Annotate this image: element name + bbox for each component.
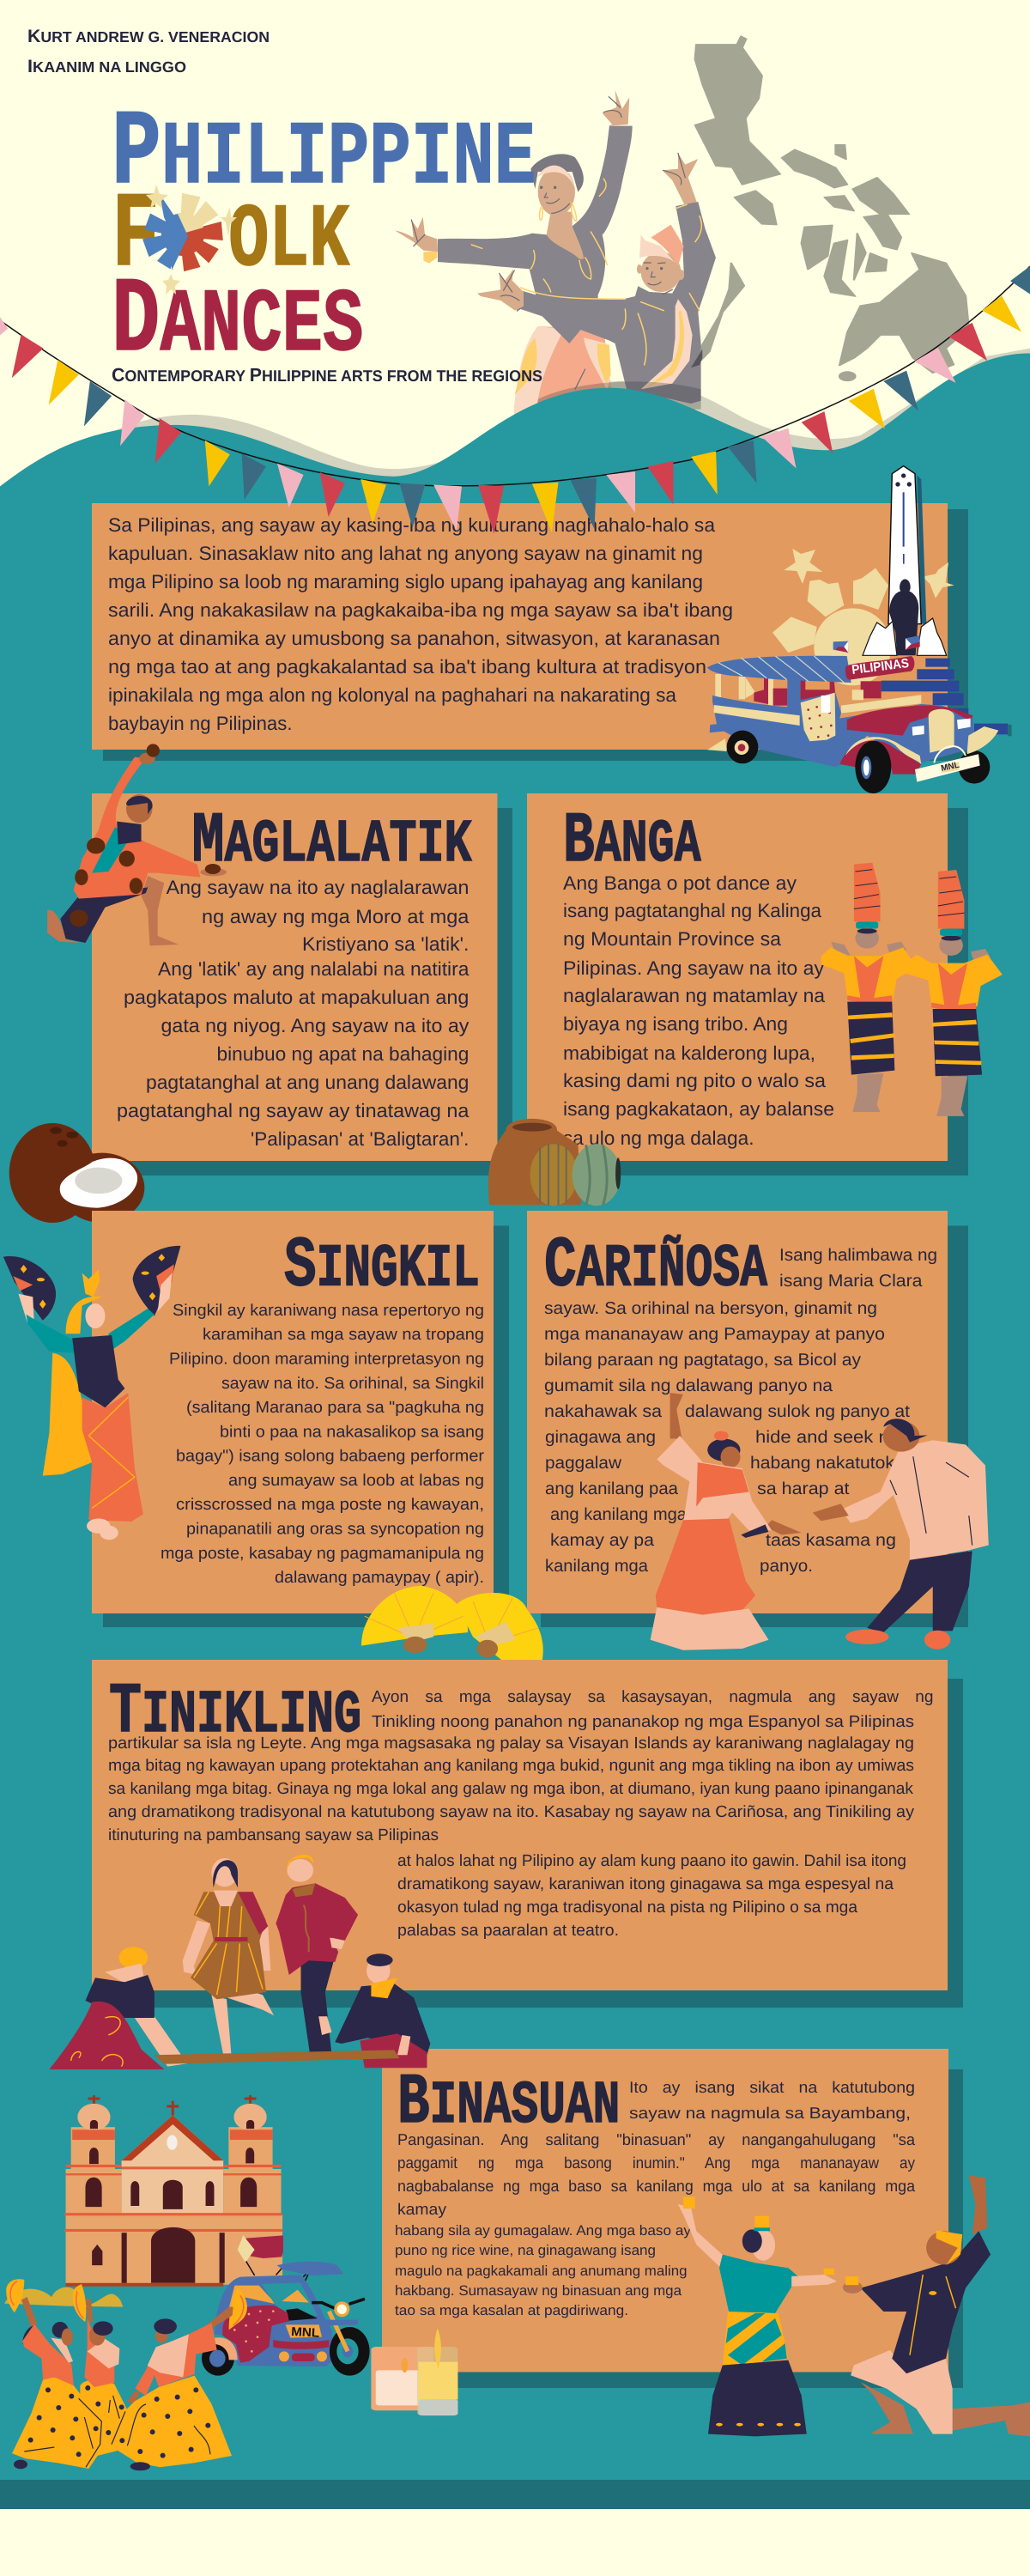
- text: maglalatik: pagtatanghal at ang unang dalawang: [146, 1072, 469, 1093]
- text: banga: biyaya ng isang tribo. Ang: [563, 1013, 788, 1035]
- text: cariñosa: dalawang sulok ng panyo at: [685, 1402, 910, 1421]
- text: banga: Ang Banga o pot dance ay: [563, 872, 797, 894]
- wave: pale back layer: [66, 349, 1030, 515]
- tricycle plate text: MNL: [291, 2325, 320, 2341]
- text: cariñosa: sa harap at: [757, 1479, 850, 1498]
- text: singkil: Pilipino. doon maraming interpretasyon ng: [169, 1350, 484, 1369]
- panel: introduction: [92, 503, 968, 761]
- text: tinikling: Tinikling noong panahon ng pananakop ng mga Espanyol sa Pilipinas: [372, 1713, 914, 1731]
- illustration: coconuts: [9, 1123, 144, 1223]
- text: cariñosa: mga mananayaw ang Pamaypay at panyo: [544, 1325, 885, 1344]
- text: banga: [563, 872, 834, 1149]
- text: maglalatik: Ang 'latik' ay ang nalalabi na natitira: [158, 958, 470, 980]
- text: introduction: sarili. Ang nakakasilaw na pagkakaiba-iba ng mga sayaw sa iba't ibang: [108, 599, 733, 621]
- text: cariñosa: Isang halimbawa ng: [779, 1246, 937, 1265]
- text: cariñosa: kanilang mga: [545, 1557, 649, 1576]
- illustration: binasuan man: [843, 2176, 1030, 2436]
- text: singkil: [161, 1302, 485, 1587]
- text: singkil: sayaw na ito. Sa orihinal, sa Singkil: [221, 1375, 484, 1393]
- text: singkil: pinapanatili ang oras sa syncopation ng: [186, 1520, 484, 1539]
- text: tinikling: itinuturing na pambansang sayaw sa Pilipinas: [108, 1826, 439, 1844]
- text: banga: Pilipinas. Ang sayaw na ito ay: [563, 957, 825, 979]
- text: tinikling: okasyon tulad ng mga tradisyonal na pista ng Pilipino o sa mga: [397, 1899, 857, 1917]
- text: cariñosa: nakahawak sa: [544, 1402, 663, 1421]
- heading: binasuan: BINASUAN: [397, 2063, 620, 2143]
- text: introduction: [108, 514, 733, 734]
- text: binasuan: nagbabalanse ng mga baso sa kanilang mga ulo at sa kanilang mga: [397, 2177, 916, 2195]
- illustration: clay pots: [488, 1119, 621, 1206]
- byline: KURT ANDREW G. VENERACION: [27, 27, 270, 46]
- text: maglalatik: pagtatanghal ng sayaw ay tinatawag na: [117, 1100, 470, 1121]
- title: OLK: [228, 191, 350, 292]
- text: singkil: dalawang pamaypay ( apir).: [275, 1569, 484, 1587]
- illustration: tinikling dancers: [49, 1855, 430, 2069]
- text: introduction: ipinakilala ng mga alon ng kolonyal na paghahari na nakarating sa: [108, 684, 676, 706]
- text: singkil: Singkil ay karaniwang nasa repertoryo ng: [173, 1302, 484, 1320]
- panel: cariñosa: [527, 1211, 968, 1627]
- text: binasuan lower block: hakbang. Sumasayaw ng binasuan ang mga: [395, 2283, 682, 2299]
- text: singkil: mga poste, kasabay ng pagmamanipula ng: [161, 1545, 484, 1563]
- text: binasuan: Ito ay isang sikat na katutubong: [629, 2078, 915, 2096]
- text: cariñosa: paggalaw: [545, 1454, 622, 1473]
- text: tinikling: partikular sa isla ng Leyte. Ang mga magsasaka ng palay sa Visayan Islands ay karaniwang naglalagay ng: [108, 1735, 914, 1753]
- text: introduction: baybayin ng Pilipinas.: [108, 713, 292, 734]
- illustration: two hero dancers: [395, 90, 716, 429]
- text: maglalatik: ng away ng mga Moro at mga: [202, 906, 470, 927]
- text: cariñosa: ginagawa ang: [545, 1428, 656, 1447]
- text: introduction: Sa Pilipinas, ang sayaw ay kasing-iba ng kulturang naghahalo-halo sa: [108, 514, 715, 536]
- text: tinikling: dramatikong sayaw, karaniwan itong ginagawa sa mga espesyal na: [397, 1875, 894, 1893]
- heading: singkil: SINGKIL: [284, 1225, 480, 1306]
- text: maglalatik: gata ng niyog. Ang sayaw na ito ay: [161, 1015, 470, 1036]
- text: banga: mabibigat na kalderong lupa,: [563, 1042, 815, 1064]
- text: cariñosa: isang Maria Clara: [779, 1272, 923, 1291]
- heading: tinikling: TINIKLING: [109, 1672, 361, 1753]
- text: maglalatik: pagkatapos maluto at mapakuluan ang: [124, 987, 469, 1008]
- text: introduction: ng mga tao at ang pagkakalantad sa iba't ibang kultura at tradisyon: [108, 656, 706, 677]
- byline: IKAANIM NA LINGGO: [27, 57, 186, 76]
- bunting string and flags: [0, 266, 1030, 534]
- text: maglalatik: 'Palipasan' at 'Baligtaran'.: [251, 1128, 469, 1150]
- text: binasuan: paggamit ng mga basong inumin." Ang mga mananayaw ay: [397, 2154, 916, 2172]
- text: singkil: karamihan sa mga sayaw na tropang: [203, 1326, 484, 1344]
- text: singkil: binti o paa na nakasalikop sa isang: [220, 1424, 484, 1442]
- text: introduction: kapuluan. Sinasaklaw nito ang lahat ng anyong sayaw na ginamit ng: [108, 543, 703, 564]
- title: PHILIPPINE: [112, 94, 536, 215]
- illustration: three dancers in yellow skirts: [6, 2279, 247, 2470]
- text: binasuan lower block: magulo na pagkakamali ang anumang maling: [395, 2263, 687, 2279]
- panel: binasuan: [382, 2049, 963, 2388]
- text: maglalatik: binubuo ng apat na bahaging: [216, 1043, 469, 1065]
- illustration: second banga dancer: [900, 870, 1003, 1116]
- panel: maglalatik: [92, 793, 512, 1176]
- panel: banga: [527, 793, 968, 1176]
- text: banga: isang pagtatanghal ng Kalinga: [563, 900, 821, 921]
- text: cariñosa: hide and seek ng: [755, 1428, 900, 1447]
- illustration: banga dancers: [821, 863, 917, 1112]
- text: singkil: ang sumayaw sa loob at labas ng: [228, 1472, 484, 1490]
- text: tinikling: palabas sa paaralan at teatro.: [397, 1922, 619, 1940]
- text: tinikling: ang dramatikong tradisyonal na katutubong sayaw na ito. Kasabay ng sayaw na Cariñosa, ang Tinikiling ay: [108, 1803, 915, 1821]
- text: introduction: mga Pilipino sa loob ng maraming siglo upang ipahayag ang kanilang: [108, 571, 703, 592]
- text: binasuan lower block: puno ng rice wine, na ginagawang isang: [395, 2243, 656, 2258]
- map of the Philippines: [693, 36, 969, 381]
- text: banga: isang pagkakataon, ay balanse: [563, 1098, 834, 1120]
- subtitle: CONTEMPORARY PHILIPPINE ARTS FROM THE REGIONS: [112, 364, 542, 386]
- text: binasuan lower block: habang sila ay gumagalaw. Ang mga baso ay: [395, 2223, 692, 2239]
- text: binasuan: [397, 2078, 916, 2218]
- illustration: yellow fans: [361, 1586, 543, 1663]
- illustration: tricycle: [202, 2235, 370, 2376]
- panel: singkil: [92, 1211, 509, 1627]
- text: tinikling: sa kanilang mga bitag. Ginaya ng mga lokal ang galaw ng mga ibon, at diumano, iyan kung paano ipinanganak: [108, 1780, 913, 1798]
- title: [112, 94, 536, 382]
- illustration: haystacks: [4, 2287, 123, 2307]
- heading: maglalatik: MAGLALATIK: [192, 801, 472, 882]
- text: banga: ng Mountain Province sa: [563, 928, 781, 950]
- illustration: jeepney: [707, 656, 998, 793]
- text: maglalatik: [117, 877, 470, 1150]
- byline: [27, 27, 270, 76]
- illustration: singkil dancer: [3, 1246, 180, 1540]
- text: banga: kasing dami ng pito o walo sa: [563, 1070, 827, 1091]
- text: maglalatik: Ang sayaw na ito ay naglalarawan: [167, 877, 469, 898]
- jeepney sign text: PILIPINAS: [851, 656, 910, 677]
- text: singkil: (salitang Maranao para sa "pagkuha ng: [186, 1399, 484, 1417]
- text: binasuan: kamay: [397, 2200, 447, 2218]
- jeepney plate text: MNL: [940, 761, 960, 774]
- text: cariñosa: taas kasama ng: [766, 1531, 896, 1550]
- text: maglalatik: Kristiyano sa 'latik'.: [302, 933, 469, 955]
- text: introduction: anyo at dinamika ay umusbong sa panahon, sitwasyon, at karanasan: [108, 628, 720, 649]
- text: cariñosa: gumamit sila ng dalawang panyo na: [544, 1376, 833, 1395]
- heading: cariñosa: CARIÑOSA: [544, 1225, 767, 1306]
- text: cariñosa: panyo.: [760, 1557, 813, 1576]
- illustration: bamboo pole: [154, 2050, 399, 2064]
- text: cariñosa: bilang paraan ng pagtatago, sa Bicol ay: [544, 1351, 861, 1370]
- text: binasuan lower block: tao sa mga kasalan at pagdiriwang.: [395, 2303, 628, 2318]
- text: banga: sa ulo ng mga dalaga.: [563, 1127, 754, 1149]
- text: singkil: bagay") isang solong babaeng performer: [176, 1448, 485, 1465]
- text: cariñosa: sayaw. Sa orihinal na bersyon, ginamit ng: [544, 1299, 877, 1318]
- text: cariñosa: habang nakatutok: [750, 1454, 895, 1473]
- text: cariñosa: ang kanilang mga: [550, 1505, 688, 1524]
- icon: philippine flag sun: [142, 185, 237, 295]
- illustration: candles: [371, 2329, 457, 2415]
- text: binasuan lower block: [395, 2223, 692, 2318]
- illustration: binasuan woman: [678, 2196, 837, 2436]
- text: tinikling: at halos lahat ng Pilipino ay alam kung paano ito gawin. Dahil isa itong: [397, 1852, 906, 1870]
- text: cariñosa: ang kanilang paa: [545, 1479, 679, 1498]
- text: tinikling: Ayon sa mga salaysay sa kasaysayan, nagmula ang sayaw ng: [372, 1688, 934, 1706]
- text: tinikling: mga bitag ng kawayan upang protektahan ang kanilang mga bukid, ngunit ang mga tikling na ibon ay umiwas: [108, 1757, 914, 1775]
- title: DANCES: [112, 262, 363, 382]
- panel: tinikling: [92, 1660, 963, 2008]
- text: binasuan: Pangasinan. Ang salitang "binasuan" ay nangangahulugang "sa: [397, 2130, 916, 2148]
- text: singkil: crisscrossed na mga poste ng kawayan,: [176, 1496, 484, 1514]
- jeepney sign: [845, 656, 914, 680]
- text: cariñosa: kamay ay pa: [550, 1531, 655, 1550]
- illustration: rizal monument and sun: [772, 466, 1012, 736]
- text: tinikling: [108, 1688, 934, 1940]
- illustration: cariñosa couple: [651, 1393, 989, 1650]
- title: F: [112, 177, 160, 297]
- text: cariñosa: [544, 1246, 937, 1576]
- illustration: maglalatik dancer: [47, 744, 227, 945]
- illustration: church: [64, 2095, 282, 2287]
- text: binasuan: sayaw na nagmula sa Bayambang,: [629, 2104, 911, 2122]
- text: banga: naglalarawan ng matamlay na: [563, 985, 825, 1006]
- heading: banga: BANGA: [563, 801, 701, 882]
